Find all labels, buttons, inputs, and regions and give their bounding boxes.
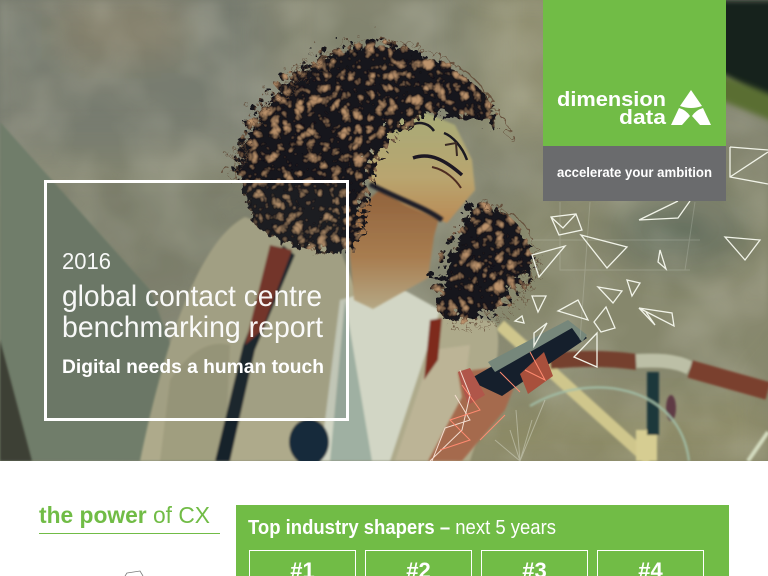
- subtitle: Digital needs a human touch: [62, 357, 324, 378]
- title box: [46, 182, 348, 420]
- tagline strip: [543, 146, 726, 201]
- low-poly triangle overlay: [515, 147, 768, 367]
- year: 2016: [62, 248, 111, 274]
- rank box 3: [482, 550, 588, 576]
- fingers over phone: [520, 352, 553, 394]
- report title: benchmarking report: [62, 311, 324, 344]
- panel: top industry shapers: [236, 505, 729, 576]
- wordmark: dimension: [557, 88, 666, 111]
- dotted grid overlay: [495, 202, 700, 461]
- heading: the power of CX: the power of CX: [39, 502, 210, 528]
- logo panel: [543, 0, 726, 146]
- ground texture: [45, 94, 726, 231]
- tagline strip: accelerate your ambition: [557, 165, 712, 180]
- report title: global contact centre: [62, 280, 322, 313]
- woman's neck and face: [350, 110, 475, 309]
- wordmark: data: [619, 106, 667, 129]
- curly hair: [222, 34, 529, 319]
- rank box 1: [250, 550, 356, 576]
- bicycle: [500, 325, 768, 461]
- hand and phone: [428, 320, 587, 461]
- rank box 4: [598, 550, 704, 576]
- panel heading: Top industry shapers – next 5 years: [248, 517, 556, 539]
- woman's torso: [140, 217, 498, 465]
- rank box 2: [366, 550, 472, 576]
- pavement lower left: [0, 124, 170, 461]
- icon: cut-off sketch: [125, 571, 143, 576]
- icon: triangles: [671, 90, 711, 125]
- dark foliage top right: [726, 0, 768, 122]
